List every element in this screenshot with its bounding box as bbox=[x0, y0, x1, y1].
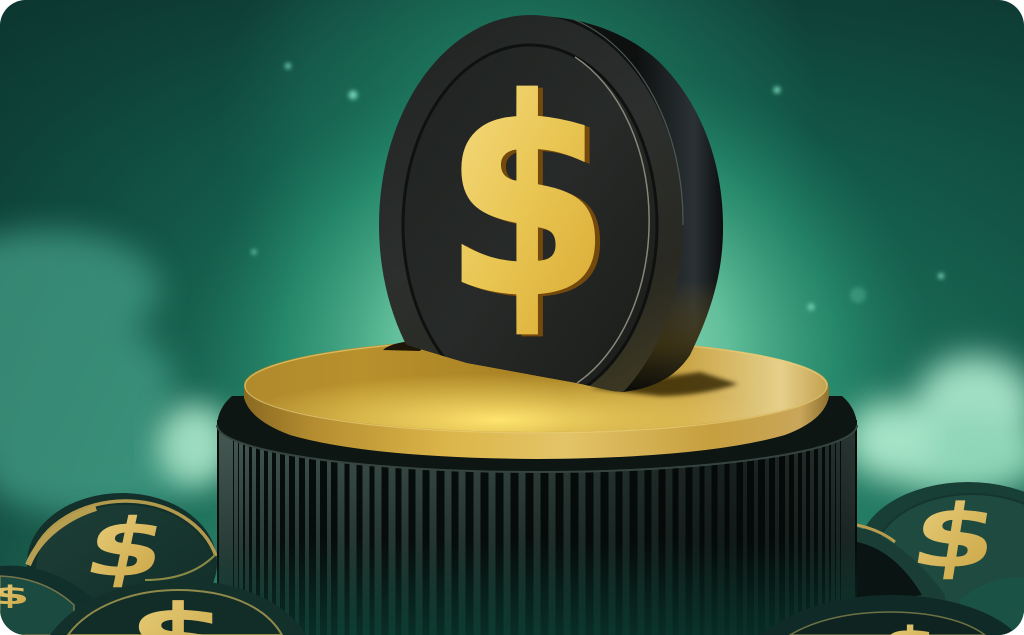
slot shadow bbox=[383, 342, 422, 351]
background coin: right large bbox=[858, 482, 1024, 622]
clouds: right bbox=[845, 355, 1024, 495]
background coin: right small stacked bbox=[857, 525, 1024, 635]
pedestal collar bbox=[217, 396, 857, 472]
cloud glow beside pedestal bbox=[157, 403, 233, 487]
main coin bbox=[379, 15, 724, 392]
background coin: left large: $ bbox=[77, 502, 174, 595]
coin rim bbox=[379, 15, 683, 392]
coin edge bbox=[530, 16, 723, 394]
pedestal: ribbed black cylinder bbox=[217, 420, 857, 635]
clouds: left bbox=[0, 230, 200, 515]
background coin: bottom left bbox=[0, 566, 75, 635]
background coin: bottom center-left bbox=[50, 580, 306, 635]
dollar sign shadow: $ bbox=[449, 44, 615, 360]
background coin: bottom right bbox=[760, 595, 1012, 635]
dollar sign: $ bbox=[444, 42, 610, 358]
sparkles bbox=[252, 63, 944, 310]
background coin: right large: $ bbox=[904, 486, 1005, 588]
coin face bbox=[403, 45, 657, 405]
background coin: left large bbox=[25, 493, 217, 599]
gold disc bbox=[244, 338, 829, 459]
